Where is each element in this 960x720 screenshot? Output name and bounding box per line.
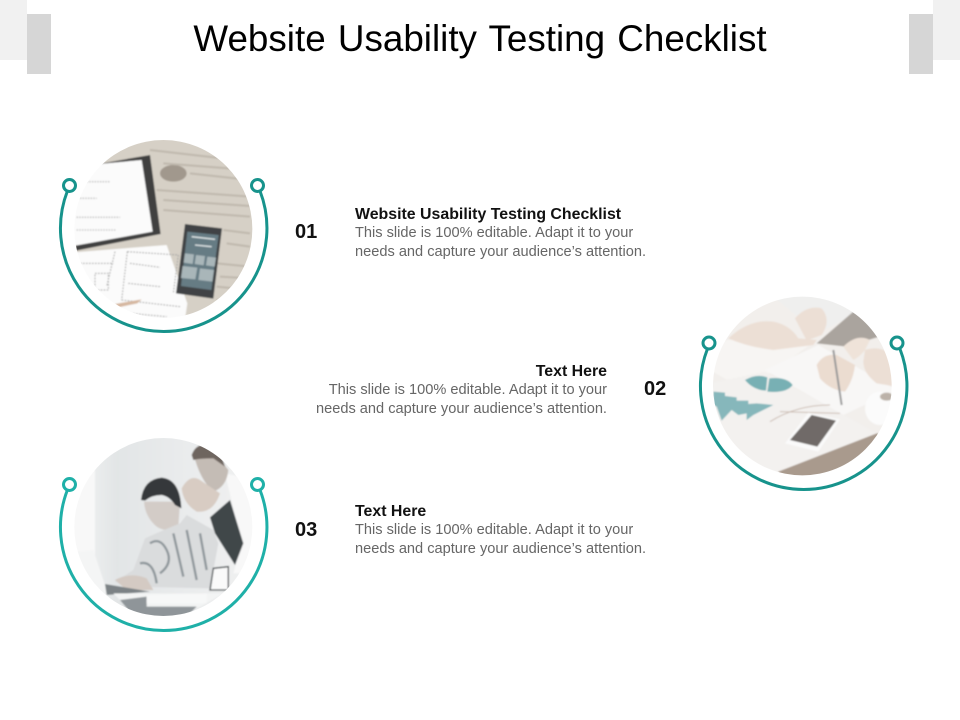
text block 03: needs and capture your audience’s attention. <box>355 541 646 557</box>
title bracket: left <box>27 14 51 74</box>
text block 03: Text Here <box>355 503 426 520</box>
text block 02 <box>316 363 607 417</box>
photo 1: tablet and phone on wooden desk <box>70 137 257 323</box>
number 01: 01 <box>295 221 317 243</box>
text block 01: needs and capture your audience’s attention. <box>355 244 646 260</box>
text block 01 <box>355 206 646 260</box>
arc ring 1 <box>60 180 267 331</box>
title bracket: right <box>909 14 933 74</box>
title: Website Usability Testing Checklist <box>193 18 767 59</box>
text block 01: Website Usability Testing Checklist <box>355 206 621 223</box>
corner tab: top left <box>0 0 27 60</box>
corner tab: top right <box>933 0 960 60</box>
number 03: 03 <box>295 519 317 541</box>
text block 02: This slide is 100% editable. Adapt it to your <box>329 382 607 398</box>
photo 3: three colleagues at a laptop <box>78 438 245 616</box>
arc ring 2 <box>700 337 907 489</box>
graphics layer <box>58 140 908 632</box>
number 02: 02 <box>644 378 666 400</box>
text block 03 <box>355 503 646 557</box>
text block 02: Text Here <box>536 363 607 380</box>
arc ring 3 <box>60 478 267 630</box>
photo 2: hands writing over charts <box>710 293 897 480</box>
text block 02: needs and capture your audience’s attention. <box>316 401 607 417</box>
text block 01: This slide is 100% editable. Adapt it to your <box>355 225 633 241</box>
text block 03: This slide is 100% editable. Adapt it to your <box>355 522 633 538</box>
